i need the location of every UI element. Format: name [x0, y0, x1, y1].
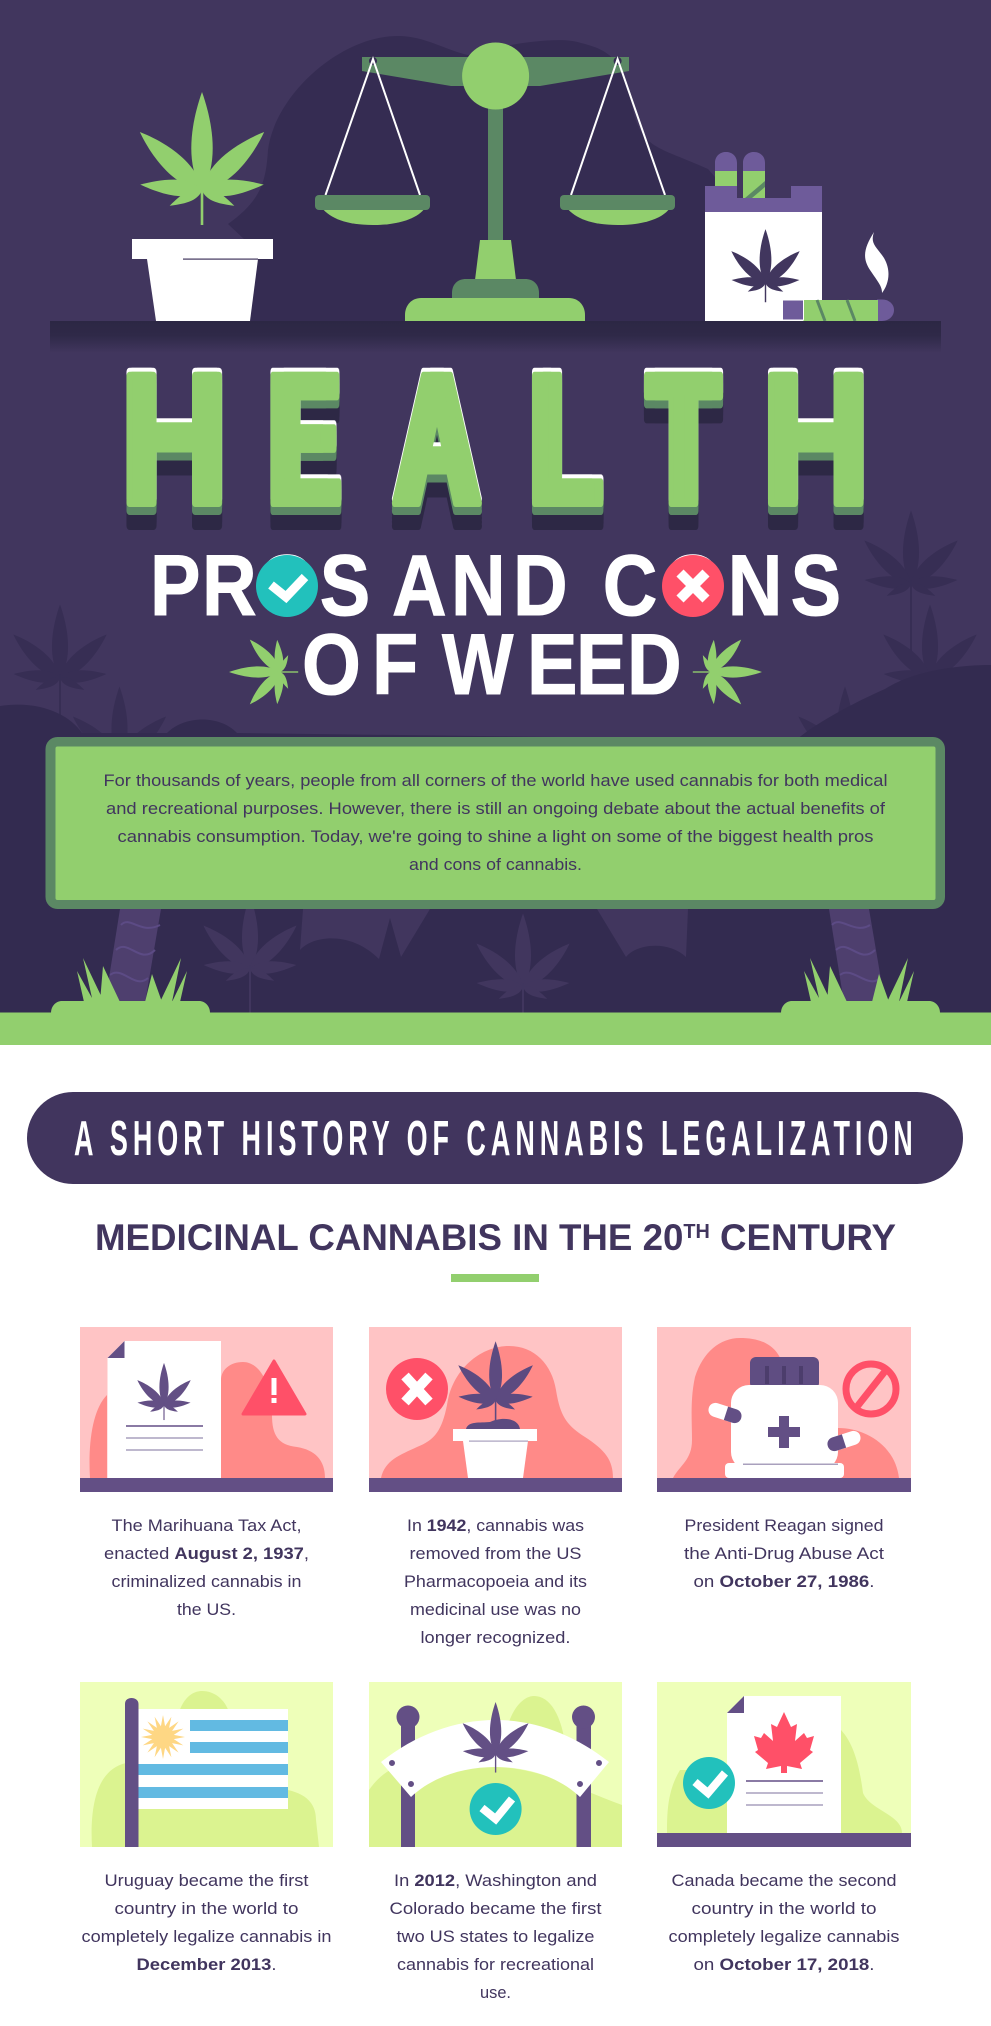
icon: teal check: [470, 1783, 522, 1835]
caption: Anti-Drug Abuse Act: on October 27, 1986 .: [694, 1572, 874, 1591]
caption: Canada: [668, 1871, 900, 1974]
title: HEALTH: A: [392, 335, 475, 543]
pot rim: [132, 239, 273, 259]
caption: Uruguay: [82, 1871, 332, 1974]
caption: Anti-Drug Abuse Act: [684, 1516, 884, 1591]
scale post: [488, 100, 503, 242]
dark hills behind the sign: [0, 665, 991, 1013]
card: Washington and Colorado: [369, 1682, 622, 1847]
flag of Uruguay: [138, 1709, 288, 1809]
icon: pill bottle: [725, 1357, 844, 1478]
icon: pill right: [826, 1429, 862, 1453]
caption: Uruguay: Uruguay became the first: [104, 1871, 309, 1890]
intro text: and cons of cannabis.: [409, 855, 582, 874]
caption: Washington and Colorado: cannabis for recreational: [397, 1955, 594, 1974]
plant in pot: [453, 1341, 537, 1478]
caption: Canada: country in the world to: [692, 1899, 876, 1918]
caption: Uruguay: completely legalize cannabis in: [82, 1927, 332, 1946]
caption: Marihuana Tax Act: enacted August 2, 1937 ,: [104, 1544, 309, 1563]
ground: [0, 1012, 991, 1045]
subheading: CENTURY: [710, 1217, 896, 1258]
joint smoke: [865, 232, 888, 293]
joint on shelf: [782, 300, 894, 321]
arch banner: [381, 1702, 609, 1797]
document: [108, 1341, 221, 1478]
green divider: [451, 1274, 539, 1282]
title: of weed: OF WEED: [302, 618, 682, 713]
header background: [0, 0, 991, 1045]
left grass: [51, 958, 210, 1013]
scale knob: [462, 42, 529, 110]
scale base: [405, 240, 585, 321]
caption: Pharmacopoeia removal: removed from the US: [410, 1544, 582, 1563]
subheading: MEDICINAL CANNABIS IN THE 20: [95, 1217, 688, 1258]
caption: Washington and Colorado: Colorado became the first: [390, 1899, 602, 1918]
caption: Anti-Drug Abuse Act: President Reagan signed: [684, 1516, 884, 1535]
right grass: [781, 958, 940, 1013]
scale strings: [326, 59, 665, 195]
caption: Canada: Canada became the second: [672, 1871, 896, 1890]
icon: warning triangle: [243, 1361, 305, 1414]
caption: Pharmacopoeia removal: longer recognized.: [420, 1628, 570, 1647]
lower background leaves: [198, 896, 575, 1013]
icon: cross in O: [662, 555, 724, 617]
heading line one: PROS AND CONS: [150, 539, 841, 634]
gate posts: [396, 1706, 595, 1847]
caption: Washington and Colorado: two US states to legalize: [396, 1927, 594, 1946]
pot body: [147, 259, 258, 321]
caption: Canada: completely legalize cannabis: [668, 1927, 900, 1946]
box top: [705, 186, 822, 212]
plant leaf: [133, 92, 271, 225]
banner heading: A SHORT HISTORY OF CANNABIS LEGALIZATION: [74, 1112, 913, 1166]
dark blob behind scale: [228, 36, 822, 321]
title: HEALTH: H: [761, 336, 868, 543]
background leaves: [8, 510, 982, 786]
caption: Washington and Colorado: use.: [480, 1983, 511, 2002]
subheading: TH: [683, 1221, 710, 1243]
left pan: [315, 195, 430, 225]
potted plant: [132, 92, 273, 321]
icon: prohibition sign: [846, 1364, 896, 1414]
card: Uruguay: [80, 1682, 333, 1847]
caption: Pharmacopoeia removal: [404, 1516, 587, 1647]
shelf: [50, 321, 941, 353]
caption: Marihuana Tax Act: [104, 1516, 309, 1619]
title: pros and cons: [150, 539, 841, 634]
title: HEALTH: T: [645, 337, 713, 543]
caption: Washington and Colorado: [390, 1871, 602, 2002]
title: HEALTH: H: [120, 336, 226, 543]
intro text: and recreational purposes. However, there is still an ongoing debate about the actual benefits of: [106, 799, 885, 818]
card: Marihuana Tax Act: [80, 1327, 333, 1492]
title: HEALTH: E: [266, 337, 331, 543]
caption: Marihuana Tax Act: The Marihuana Tax Act,: [112, 1516, 302, 1535]
box body: [705, 212, 822, 321]
cannabis box with joints: [705, 152, 822, 321]
scale beam: [362, 57, 629, 86]
caption: Uruguay: country in the world to: [114, 1899, 298, 1918]
right tree trunk: [829, 909, 885, 1003]
right pan: [560, 195, 675, 225]
card: Pharmacopoeia removal: [369, 1327, 622, 1492]
icon: pill left: [707, 1401, 743, 1425]
caption: Marihuana Tax Act: the US.: [177, 1600, 236, 1619]
icon: teal check: [683, 1757, 735, 1809]
caption: Washington and Colorado: In 2012, Washington and: [394, 1871, 597, 1890]
caption: Pharmacopoeia removal: In 1942, cannabis was: [407, 1516, 584, 1535]
caption: Anti-Drug Abuse Act: the Anti-Drug Abuse Act: [684, 1544, 884, 1563]
card: Canada: [657, 1682, 911, 1847]
caption: Uruguay: December 2013 .: [136, 1955, 276, 1974]
intro panel: [46, 737, 945, 909]
section banner: [27, 1092, 963, 1184]
intro text: [104, 771, 887, 874]
title: HEALTH: [120, 335, 868, 543]
icon: right leaf: [693, 636, 762, 708]
caption: Marihuana Tax Act: criminalized cannabis in: [112, 1572, 302, 1591]
icon: left leaf: [229, 636, 298, 708]
left tree trunk: [105, 909, 161, 1003]
caption: Canada: on October 17, 2018 .: [694, 1955, 874, 1974]
icon: check in O: [256, 555, 318, 617]
caption: Pharmacopoeia removal: Pharmacopoeia and its: [404, 1572, 587, 1591]
beam holes: [369, 57, 622, 65]
intro text: cannabis consumption. Today, we're going to shine a light on some of the biggest health pros: [118, 827, 874, 846]
icon: red cross: [386, 1358, 448, 1420]
intro text: For thousands of years, people from all corners of the world have used cannabis for both medical: [104, 771, 887, 790]
joints in box: [715, 152, 765, 199]
caption: Pharmacopoeia removal: medicinal use was no: [410, 1600, 581, 1619]
icon: sun: [141, 1715, 185, 1759]
box leaf: [727, 229, 804, 302]
document with maple leaf: [727, 1696, 841, 1833]
flag pole: [125, 1698, 138, 1847]
icon: maple leaf: [754, 1712, 814, 1773]
balance scale: [315, 42, 675, 321]
lighter gaps under the sign: [300, 909, 688, 959]
card: Anti-Drug Abuse Act: [657, 1327, 911, 1492]
title: HEALTH: L: [527, 337, 595, 543]
